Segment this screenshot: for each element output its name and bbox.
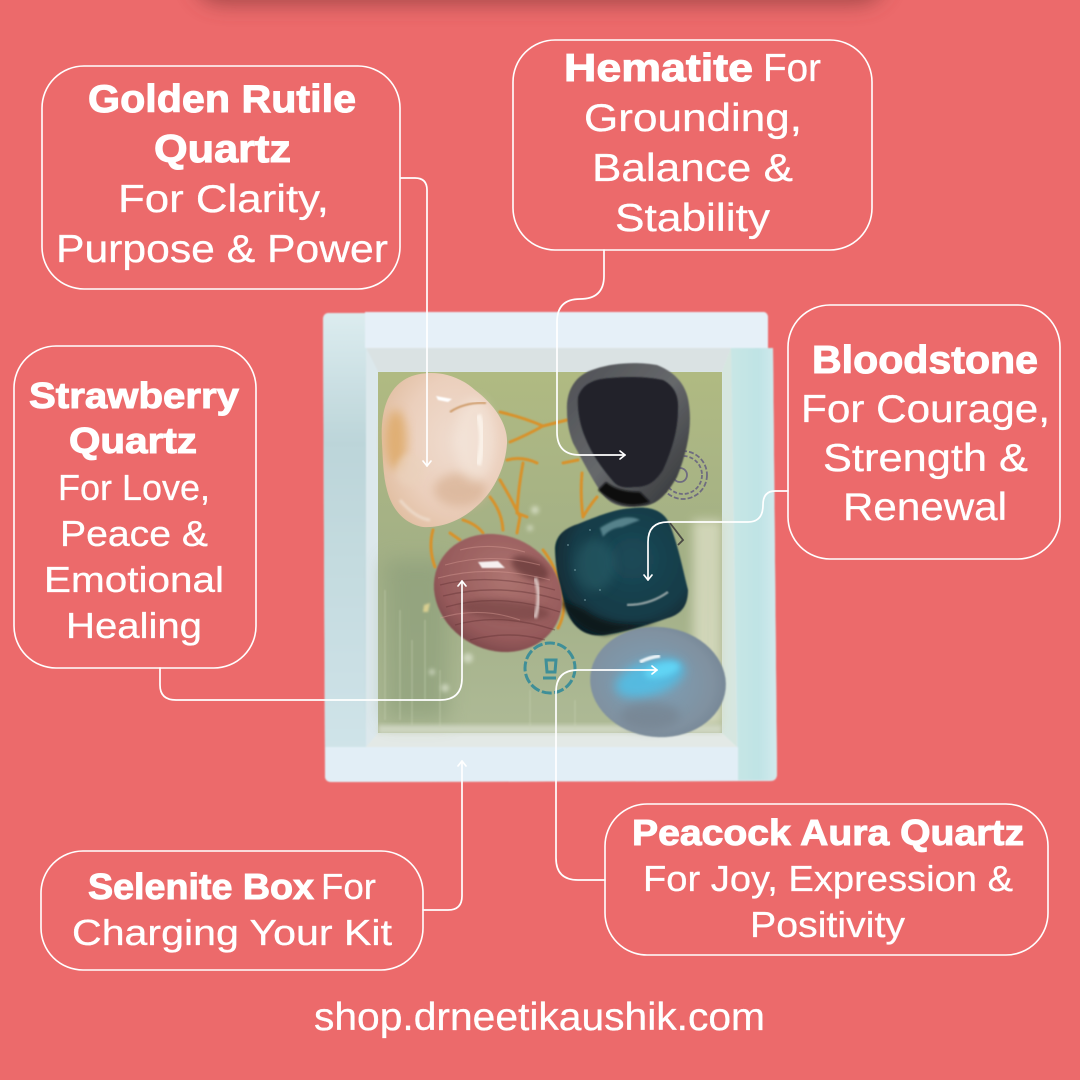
stone: hematite [567, 363, 690, 507]
label text: Peacock Aura Quartz [632, 812, 1024, 853]
selenite box frame [323, 312, 777, 782]
label text: Renewal [843, 486, 1007, 529]
label text: Golden Rutile [88, 78, 356, 121]
grey chakra symbol [659, 451, 707, 499]
stone: bloodstone [555, 508, 688, 635]
label text [632, 812, 1024, 945]
label text: For Clarity, [118, 178, 329, 221]
label text: For [321, 866, 376, 907]
connector: golden rutile quartz [401, 178, 431, 466]
connector: hematite [557, 250, 625, 459]
label text [801, 339, 1050, 529]
selenite box with stones [323, 312, 777, 782]
connector: bloodstone [644, 491, 788, 580]
label text: Hematite [564, 47, 753, 90]
label text: Stability [615, 197, 771, 240]
selenite floor [378, 372, 722, 734]
label text: For Love, [58, 467, 210, 508]
label text: For [763, 47, 821, 90]
connector: selenite box [423, 761, 466, 910]
stone: peacock aura labradorite [585, 620, 731, 744]
label text [29, 375, 239, 646]
stone: golden rutile quartz [382, 373, 507, 527]
label text [72, 866, 392, 953]
label text: Charging Your Kit [72, 912, 392, 953]
label text: Strawberry [29, 375, 239, 416]
label text: Quartz [69, 420, 197, 461]
label text: Strength & [823, 437, 1028, 480]
stone: strawberry quartz [413, 512, 583, 674]
label text: For Courage, [801, 388, 1050, 431]
footer url: shop.drneetikaushik.com [314, 996, 765, 1039]
panel: golden rutile quartz [42, 66, 400, 289]
panel: selenite box [41, 851, 423, 970]
teal chakra symbol [525, 643, 575, 693]
panel: hematite [513, 40, 872, 250]
label text: Grounding, [584, 97, 802, 140]
connector: peacock aura quartz [556, 666, 657, 880]
label text: Positivity [750, 904, 905, 945]
connector: strawberry quartz [160, 581, 466, 700]
label text [56, 78, 388, 271]
label text: Healing [66, 605, 202, 646]
label text: Purpose & Power [56, 228, 388, 271]
label text: For Joy, Expression & [643, 858, 1013, 899]
label text: Quartz [154, 128, 291, 171]
orange lotus lines [431, 412, 597, 628]
label text [564, 47, 821, 240]
label text: Selenite Box [88, 866, 314, 907]
top shadow band [195, 0, 885, 3]
label text: Bloodstone [812, 339, 1038, 382]
label text: Peace & [60, 513, 208, 554]
panel: strawberry quartz [14, 346, 256, 668]
label text: Emotional [44, 559, 224, 600]
dark bracket mark [670, 523, 683, 545]
panel: bloodstone [788, 305, 1060, 559]
panel: peacock aura quartz [605, 804, 1048, 955]
label text: Balance & [592, 147, 793, 190]
